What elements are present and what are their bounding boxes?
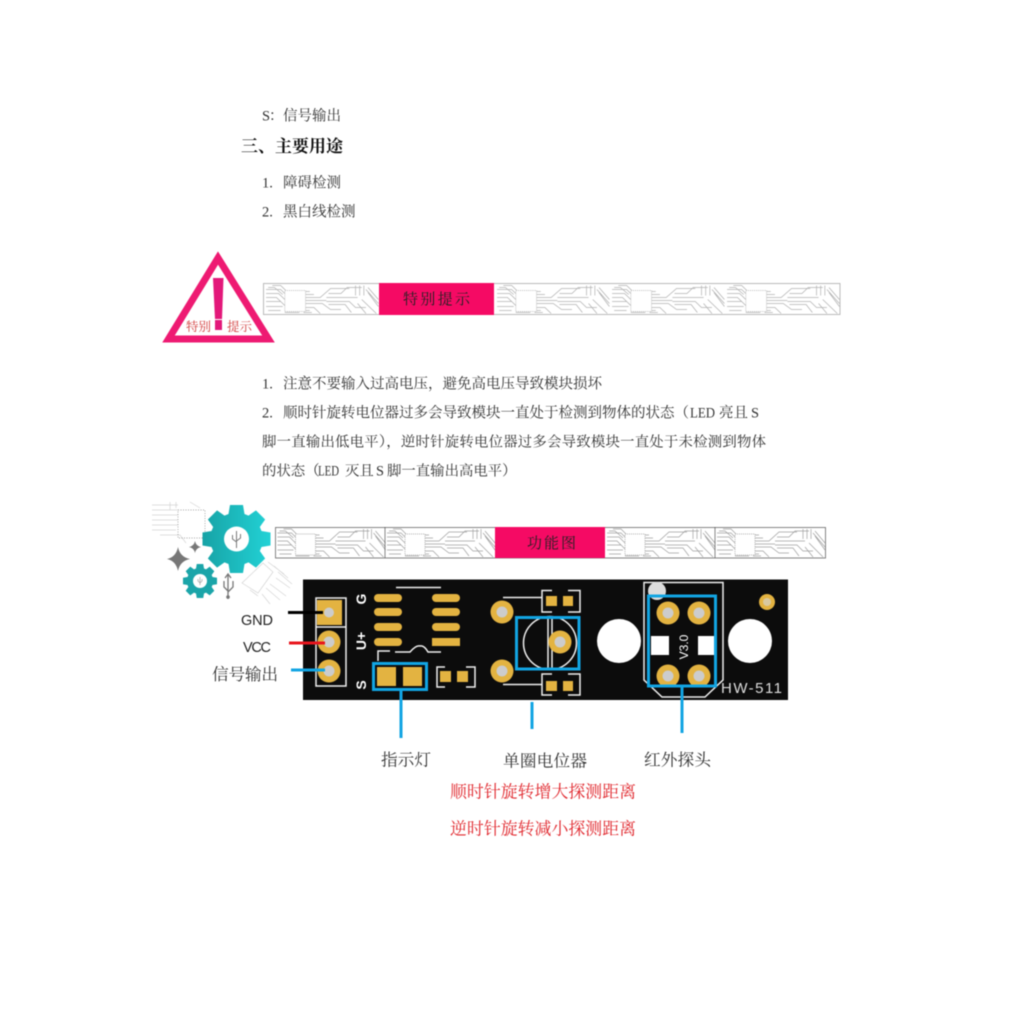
text: notice 2 line 3: 脚一直输出高电平） [387, 462, 517, 480]
text: notice 2 line 1: 2. [262, 406, 273, 422]
chip: SOP pads [374, 594, 460, 646]
text: notice 2 line 2: 脚一直输出低电平），逆时针旋转电位器过多会导致模块一直处于未检测到物体 [262, 432, 767, 450]
text: notice 2 line 1: 亮且 [719, 404, 748, 422]
text: use 1: 1. [262, 176, 273, 192]
icon: warning triangle: 特别 [186, 319, 211, 334]
icon: gears cluster [152, 502, 292, 604]
banner: function diagram strip: 功能图 [527, 535, 576, 552]
text: notice 2 line 1: LED [690, 406, 715, 422]
text: signal output line: ： [269, 108, 284, 124]
silkscreen: pin letters: G [353, 593, 369, 604]
label: infrared probe: 红外探头 [644, 750, 711, 770]
label: VCC: VCC [243, 640, 271, 656]
silkscreen: pin letters: S [353, 680, 369, 690]
small pad [759, 594, 775, 610]
text: use 2: 黑白线检测 [283, 202, 356, 220]
lead: indicator [400, 690, 402, 738]
text: notice 2 line 1: S [751, 406, 759, 422]
lead: VCC wire [289, 642, 325, 644]
resistor pads [437, 667, 475, 687]
icon: warning triangle: 提示 [227, 319, 252, 334]
silkscreen: pin letters: U+ [353, 632, 369, 650]
banner: special notice strip [264, 283, 840, 315]
infrared probe footprint [644, 582, 723, 697]
silkscreen: pin letters [353, 593, 369, 690]
text: notice 2 line 3: 灭且 [345, 462, 374, 480]
label: potentiometer: 单圈电位器 [503, 752, 587, 770]
text: signal output line: S [262, 108, 270, 124]
label: GND: GND [241, 613, 273, 629]
banner: function diagram strip [276, 527, 826, 558]
mounting holes [597, 619, 772, 663]
note: counter-clockwise: 逆时针旋转减小探测距离 [450, 818, 636, 838]
text: notice 1: 注意不要输入过高电压，避免高电压导致模块损坏 [283, 374, 602, 392]
board label: HW-511 [721, 680, 782, 697]
diagram: PCB board [303, 580, 788, 700]
lead: infrared probe [680, 686, 684, 733]
text: notice 2 line 3: 的状态（ [262, 462, 320, 480]
note: clockwise: 顺时针旋转增大探测距离 [450, 782, 636, 802]
indicator LED pads [374, 664, 426, 690]
text: use 1: 障碍检测 [283, 174, 341, 192]
text: notice 2 line 3: LED [318, 464, 339, 480]
heading: main uses: 三、主要用途 [241, 136, 344, 156]
lead: GND wire [288, 611, 323, 614]
text: notice 1: 1. [262, 376, 273, 392]
lead: signal wire [291, 668, 325, 672]
banner: special notice strip: 特别提示 [403, 290, 471, 308]
text: notice 2 line 3: S [376, 464, 384, 480]
icon: warning triangle [168, 258, 268, 339]
label: indicator: 指示灯 [381, 750, 431, 770]
connector: header pads [316, 598, 346, 686]
text: notice 2 line 1: 顺时针旋转电位器过多会导致模块一直处于检测到物体的状态（ [283, 404, 689, 422]
infrared probe footprint: V3.0 [677, 634, 691, 659]
label: signal output: 信号输出 [212, 665, 278, 684]
text: signal output line: 信号输出 [283, 108, 341, 124]
lead: potentiometer [530, 702, 534, 729]
potentiometer [490, 590, 580, 695]
text: use 2: 2. [262, 204, 273, 220]
